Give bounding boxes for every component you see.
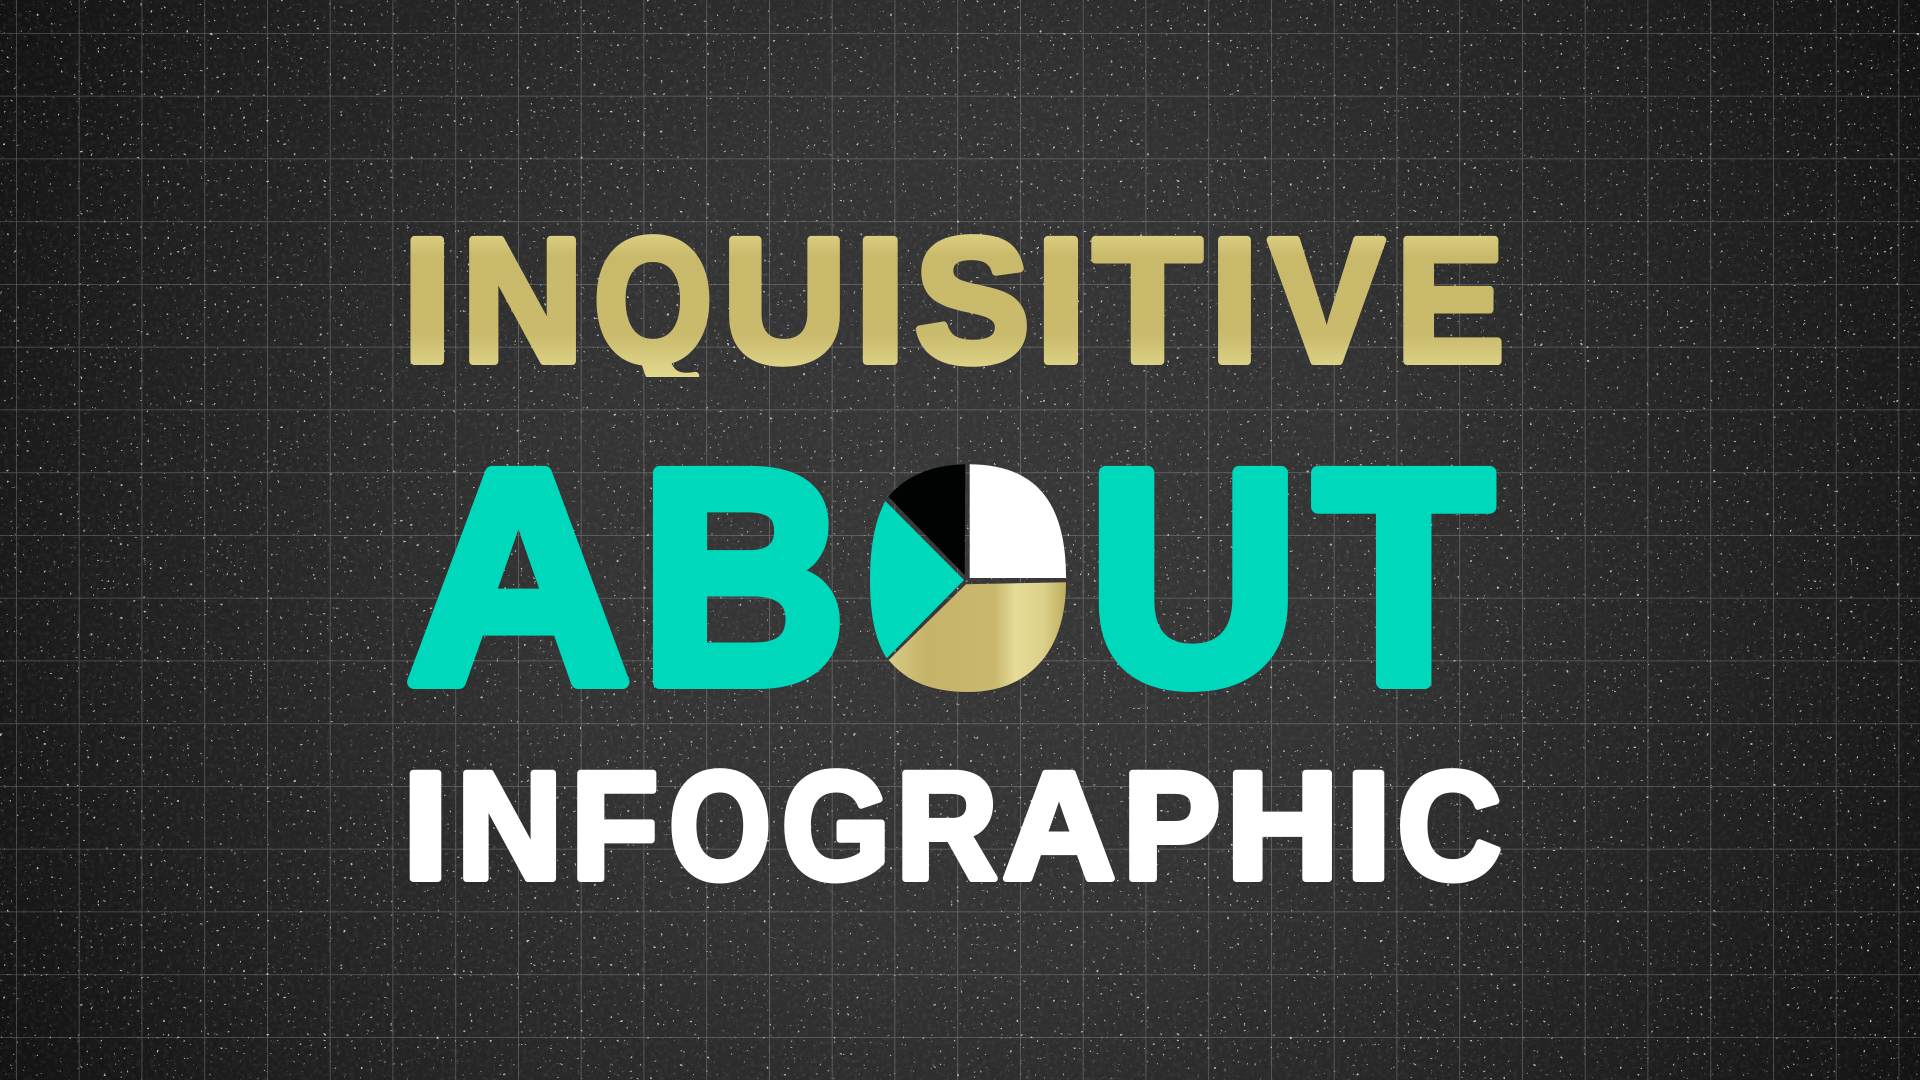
pie slice: gold: [889, 582, 1066, 692]
pie slice: black: [888, 464, 965, 575]
pie slice: teal: [870, 501, 964, 658]
heading: INQUISITIVE: I: [403, 203, 452, 399]
pie chart icon replacing the letter O: [870, 464, 1066, 692]
heading: ABOUT: T: [1314, 408, 1493, 747]
heading: INFOGRAPHIC: C: [1397, 740, 1501, 912]
pie slice: white: [970, 464, 1066, 578]
heading: INFOGRAPHIC: P: [1123, 740, 1220, 912]
heading: INFOGRAPHIC: N: [457, 740, 563, 912]
heading: INQUISITIVE: I: [1210, 203, 1259, 399]
heading: INFOGRAPHIC: A: [1002, 740, 1116, 912]
heading: INQUISITIVE: I: [855, 203, 906, 399]
heading: INFOGRAPHIC: I: [402, 740, 449, 912]
heading: INQUISITIVE: E: [1396, 203, 1504, 399]
heading: INQUISITIVE: V: [1269, 203, 1384, 399]
heading: INQUISITIVE: Q: [594, 203, 712, 399]
heading: INFOGRAPHIC: G: [782, 740, 890, 912]
heading: ABOUT: U: [1088, 408, 1299, 747]
heading: ABOUT: B: [640, 408, 846, 747]
heading: INQUISITIVE: T: [1093, 203, 1202, 399]
heading: INQUISITIVE: S: [915, 203, 1030, 399]
heading: ABOUT: A: [406, 408, 630, 747]
heading: INFOGRAPHIC: F: [571, 740, 658, 912]
heading: INFOGRAPHIC: O: [669, 740, 771, 912]
heading: INQUISITIVE: N: [462, 203, 584, 399]
heading: INQUISITIVE: U: [723, 203, 846, 399]
heading: INFOGRAPHIC: I: [1345, 740, 1392, 912]
heading: INFOGRAPHIC: R: [896, 740, 998, 912]
heading: INFOGRAPHIC: H: [1226, 740, 1339, 912]
heading: INQUISITIVE: I: [1036, 203, 1086, 399]
